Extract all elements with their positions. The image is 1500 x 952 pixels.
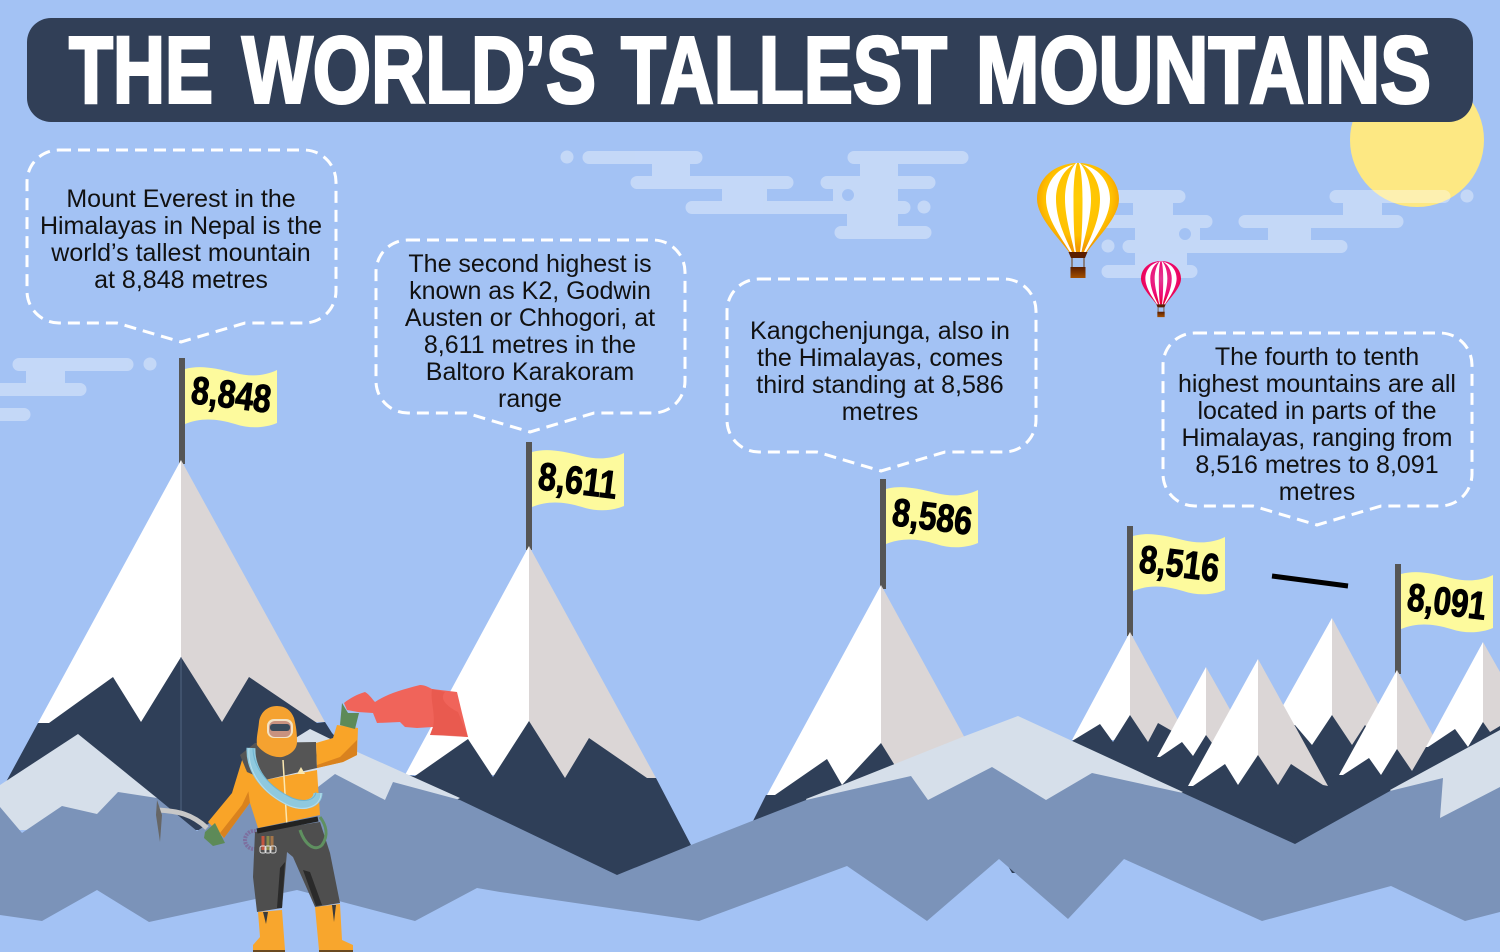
rope coil blue: [249, 748, 321, 808]
flag: 8,516: 8,516: [1137, 538, 1222, 591]
range dash between flags: [1272, 576, 1348, 586]
zip: [283, 760, 287, 827]
callout: fourth to tenth: located in parts of the: [1197, 397, 1437, 425]
callout: Kangchenjunga: [727, 279, 1036, 471]
mountain: Kangchenjunga: [753, 585, 1016, 873]
callout: fourth to tenth: metres: [1279, 478, 1355, 506]
face: [267, 719, 293, 738]
callout: K2: [376, 240, 685, 432]
callout: fourth to tenth: 8,516 metres to 8,091: [1195, 451, 1439, 479]
callout: Mount Everest: Himalayas in Nepal is the: [40, 212, 322, 240]
callout: fourth to tenth: Himalayas, ranging from: [1182, 424, 1452, 452]
flag: 8,611: 8,611: [536, 455, 620, 508]
title banner: TALLEST: [621, 18, 947, 124]
mountain: K2: [405, 546, 691, 880]
callout: fourth to tenth: [1163, 333, 1472, 525]
front blue range: [0, 767, 1500, 922]
belt: [257, 819, 318, 831]
title banner: [27, 18, 1473, 124]
mountain: right edge peak: [1400, 642, 1500, 820]
raised glove: [340, 703, 359, 729]
jacket: [245, 767, 320, 828]
climber: [156, 685, 468, 952]
mountain: tall rear peak: [1250, 618, 1420, 845]
icon: large yellow balloon: [1037, 163, 1119, 278]
mountain: Everest: [0, 460, 420, 830]
trousers: [253, 822, 340, 912]
clouds: [0, 150, 1474, 421]
badge: [297, 767, 305, 774]
callout: fourth to tenth: The fourth to tenth: [1215, 343, 1419, 371]
raised arm: [316, 725, 358, 768]
flag: 8,848: [179, 358, 277, 464]
mountain: small peak: [1157, 667, 1260, 830]
flag: 8,848: 8,848: [189, 369, 274, 422]
callout: K2: Baltoro Karakoram: [426, 358, 634, 386]
rope coil green: [300, 817, 326, 848]
callout: K2: Austen or Chhogori, at: [405, 304, 655, 332]
flag: 8,586: [880, 479, 978, 589]
sun: [1350, 73, 1484, 207]
red flag: [344, 685, 468, 737]
boots: [253, 904, 353, 952]
title banner: THE: [69, 18, 213, 124]
callout: Mount Everest: at 8,848 metres: [94, 266, 268, 294]
flag: 8,516: [1127, 526, 1225, 636]
title banner: WORLD’S: [242, 18, 596, 124]
light foothills: [0, 716, 1500, 830]
callout: K2: known as K2, Godwin: [409, 277, 651, 305]
left glove: [204, 823, 225, 846]
callout: K2: The second highest is: [408, 250, 652, 278]
callout: Mount Everest: world’s tallest mountain: [50, 239, 311, 267]
callout: Kangchenjunga: metres: [842, 398, 918, 426]
flag: 8,611: [526, 442, 624, 550]
callout: K2: 8,611 metres in the: [424, 331, 636, 359]
flag: 8,091: [1395, 564, 1493, 674]
icon: small pink balloon: [1141, 261, 1181, 317]
callout: K2: range: [498, 385, 562, 413]
left arm: [208, 757, 252, 838]
mountain: front peak: [1188, 659, 1328, 830]
callout: Mount Everest: [27, 150, 336, 342]
rope coil purple: [245, 831, 263, 849]
mountain: 8,091 peak: [1280, 670, 1440, 845]
flag: 8,586: 8,586: [890, 491, 975, 544]
callout: Kangchenjunga: the Himalayas, comes: [757, 344, 1003, 372]
ice axe: [156, 800, 207, 842]
callout: Mount Everest: Mount Everest in the: [66, 185, 296, 213]
callout: fourth to tenth: highest mountains are all: [1178, 370, 1456, 398]
hood: [257, 706, 297, 757]
carabiners: [260, 836, 276, 853]
mountain: 8,516 peak: [1072, 632, 1240, 860]
shoulders: [240, 742, 317, 780]
mountain: dark base of the far range: [1120, 735, 1500, 850]
callout: Kangchenjunga: Kangchenjunga, also in: [750, 317, 1010, 345]
callout: Kangchenjunga: third standing at 8,586: [756, 371, 1004, 399]
